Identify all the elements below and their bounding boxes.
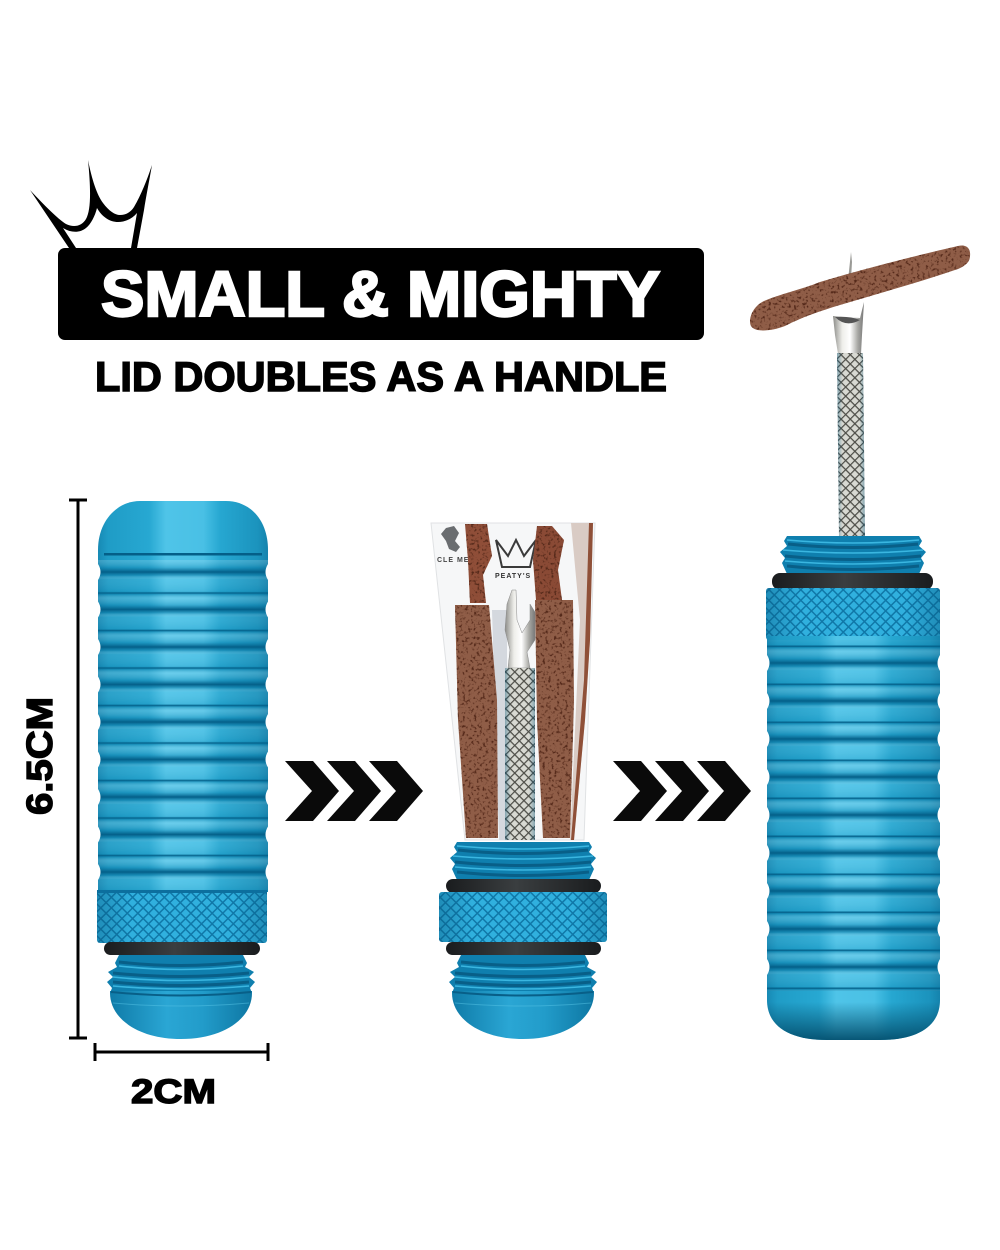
knurled collar bbox=[439, 892, 607, 942]
subtitle: LID DOUBLES AS A HANDLE bbox=[95, 353, 667, 400]
arrows: step two to step three bbox=[613, 761, 751, 821]
capsule body bbox=[760, 636, 947, 1042]
o-ring bbox=[104, 942, 260, 955]
knurled collar bbox=[97, 890, 267, 943]
lower repair strips bbox=[455, 600, 574, 838]
clear packet bbox=[431, 523, 595, 840]
width dimension bracket bbox=[95, 1043, 268, 1061]
lower thread and dome bbox=[449, 955, 597, 1039]
width label: 2CM bbox=[131, 1073, 216, 1111]
height label: 6.5CM bbox=[19, 697, 60, 815]
upper repair strips bbox=[465, 524, 564, 603]
upper thread bbox=[450, 842, 596, 880]
knurled collar bbox=[766, 588, 940, 640]
packet label fragment: CLE ME bbox=[437, 557, 469, 564]
o-ring bbox=[446, 942, 601, 955]
far packet fold with strip bbox=[570, 523, 593, 840]
repair strip bbox=[750, 245, 970, 330]
title: SMALL & MIGHTY bbox=[101, 258, 660, 330]
o-ring bbox=[446, 879, 601, 893]
capsule body bbox=[92, 500, 274, 892]
upper thread bbox=[780, 536, 926, 574]
lower thread and dome bbox=[107, 955, 255, 1039]
height dimension bracket bbox=[69, 500, 87, 1038]
crown logo bbox=[30, 160, 152, 248]
capsule with lid as handle bbox=[750, 245, 970, 1042]
packet print text: PEATY'S bbox=[495, 573, 531, 580]
title banner bbox=[58, 248, 704, 340]
packet crown print bbox=[496, 540, 536, 567]
arrows: step one to step two bbox=[285, 761, 423, 821]
reamer tool bbox=[505, 590, 535, 840]
reamer handle bbox=[833, 252, 865, 537]
o-ring bbox=[772, 573, 933, 590]
opened capsule with repair strips bbox=[431, 523, 607, 1039]
closed capsule bbox=[92, 500, 274, 1039]
hexagon marks bbox=[441, 526, 460, 552]
